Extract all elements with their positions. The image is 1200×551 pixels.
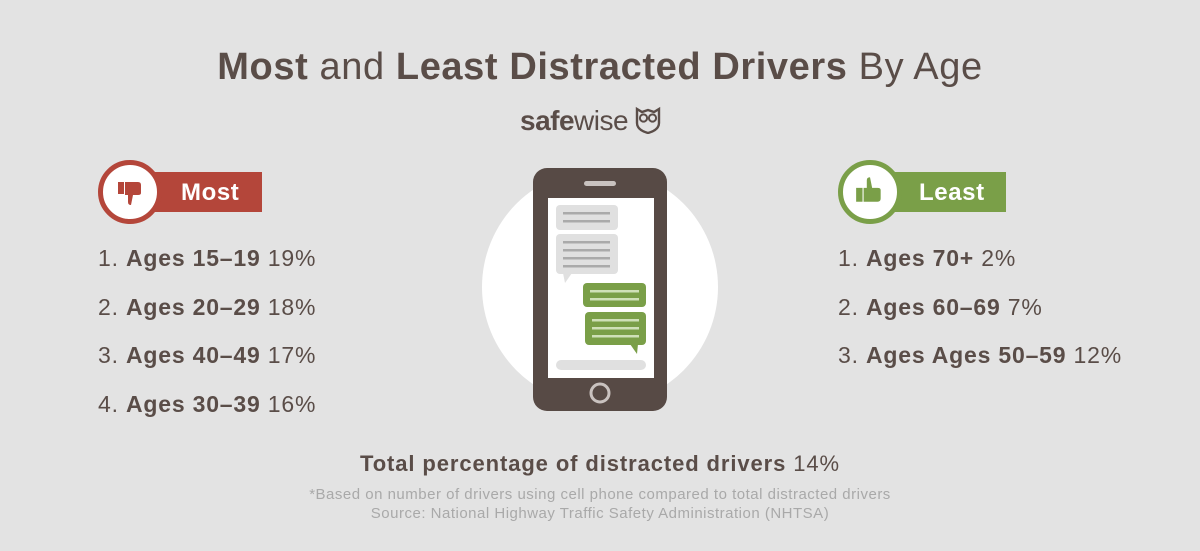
list: least distracted — [838, 245, 1122, 368]
total percentage: Total percentage of distracted drivers 14% — [360, 451, 840, 476]
list: least distracted: 3. Ages Ages 50–59 12% — [838, 342, 1122, 368]
title: Most and Least Distracted Drivers By Age — [217, 46, 983, 88]
footnote: Source: National Highway Traffic Safety Administration (NHTSA) — [371, 505, 829, 522]
phone illustration — [482, 168, 718, 411]
icon: thumbs up — [856, 177, 881, 202]
list: most distracted — [98, 245, 316, 417]
badge: Most — [98, 160, 262, 224]
list: most distracted: 3. Ages 40–49 17% — [98, 342, 316, 368]
logo: safewise: safewise — [520, 105, 628, 136]
badge: Most: Most — [181, 179, 239, 206]
list: least distracted: 1. Ages 70+ 2% — [838, 245, 1016, 271]
footnote — [309, 486, 891, 522]
icon: thumbs down — [118, 182, 141, 205]
list: most distracted: 1. Ages 15–19 19% — [98, 245, 316, 271]
badge: Least — [838, 160, 1006, 224]
footnote: *Based on number of drivers using cell phone compared to total distracted drivers — [309, 486, 891, 503]
badge: Least: Least — [919, 179, 985, 206]
list: most distracted: 2. Ages 20–29 18% — [98, 294, 316, 320]
list: most distracted: 4. Ages 30–39 16% — [98, 390, 316, 416]
list: least distracted: 2. Ages 60–69 7% — [838, 294, 1043, 320]
